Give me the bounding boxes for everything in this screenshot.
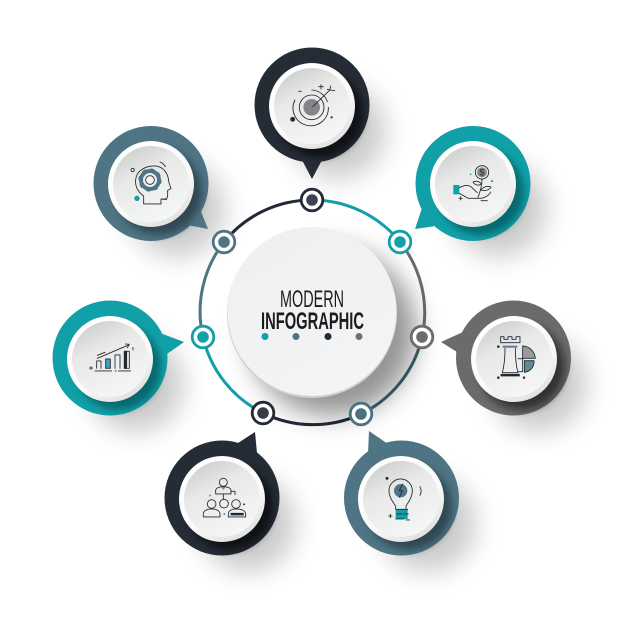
panel: top bubble xyxy=(254,48,370,179)
node: upper right xyxy=(389,231,411,253)
node: lower left xyxy=(252,402,274,424)
bubble drop shadows xyxy=(88,83,587,572)
node: left xyxy=(192,326,214,348)
panel: upper right bubble xyxy=(415,126,530,241)
panel: upper left bubble xyxy=(94,126,208,241)
icon: growth chart xyxy=(89,344,133,371)
legend dots xyxy=(262,333,362,340)
node: upper left xyxy=(213,231,235,253)
panel: lower left bubble xyxy=(164,432,280,556)
title: infographic: INFOGRAPHIC xyxy=(261,308,364,335)
icon: target xyxy=(291,85,335,126)
center disc xyxy=(227,227,416,416)
title: modern: MODERN xyxy=(280,286,344,313)
node: top xyxy=(301,189,323,211)
ring nodes xyxy=(192,189,433,425)
panel: lower right bubble xyxy=(344,431,459,556)
icon: team hierarchy xyxy=(203,478,246,517)
icon: chess rook with pie xyxy=(497,337,535,378)
node: right xyxy=(411,326,433,348)
dollar sign: $ xyxy=(479,168,485,178)
connecting ring xyxy=(200,200,425,425)
node: lower right xyxy=(350,403,372,425)
icon: light bulb xyxy=(386,477,421,520)
icon: head with gear xyxy=(131,162,171,204)
panel: left bubble xyxy=(52,300,184,416)
panel: right bubble xyxy=(441,300,571,416)
